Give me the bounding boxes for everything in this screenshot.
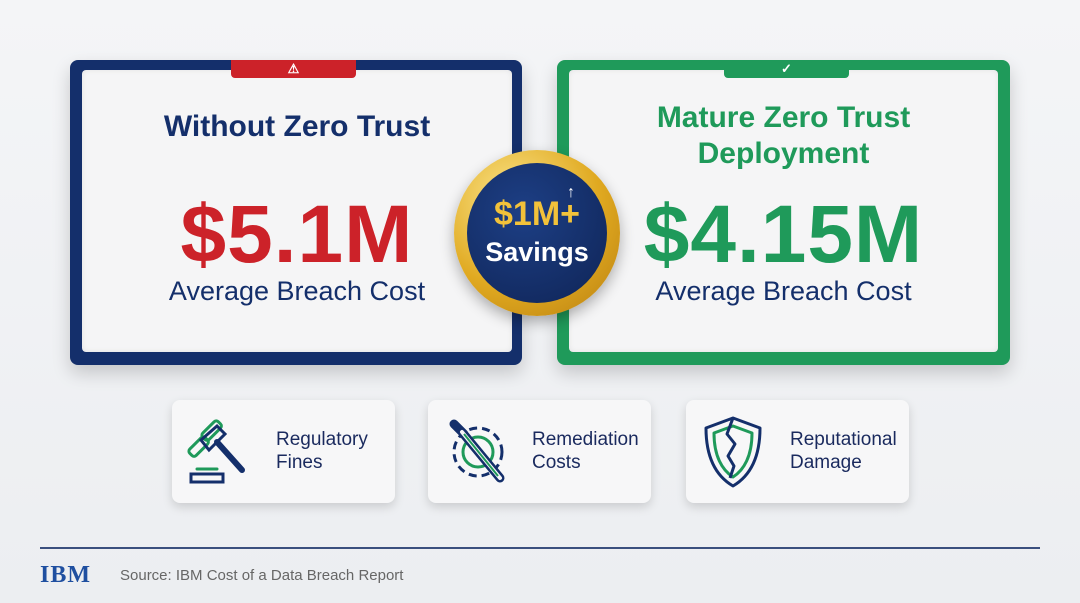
icon: wrench and gear xyxy=(450,420,504,482)
heading left: Without Zero Trust xyxy=(164,110,430,143)
badge: savings: ↑ xyxy=(567,184,575,201)
badge: savings xyxy=(454,150,620,316)
card: remediation costs xyxy=(428,400,651,503)
card: reputational damage xyxy=(686,400,909,503)
card: regulatory fines xyxy=(172,400,395,503)
tab: warning: ⚠ xyxy=(288,61,299,76)
card: reputational damage: Reputational xyxy=(790,429,897,450)
heading right: Deployment xyxy=(698,137,869,170)
logo: IBM: IBM xyxy=(40,562,91,588)
icon: gavel xyxy=(187,419,245,484)
label left: Average Breach Cost xyxy=(169,276,425,306)
tab: check: ✓ xyxy=(781,61,792,76)
tab: warning xyxy=(231,60,356,78)
inner panel left xyxy=(82,70,512,352)
panel: without zero trust xyxy=(70,60,522,365)
card: remediation costs: Remediation xyxy=(532,429,639,450)
card: regulatory fines: Regulatory xyxy=(276,429,368,450)
inner panel right xyxy=(569,70,998,352)
panel: mature zero trust xyxy=(557,60,1010,365)
card: reputational damage: Damage xyxy=(790,452,862,473)
label right: Average Breach Cost xyxy=(655,276,912,306)
heading right: Mature Zero Trust xyxy=(657,101,910,134)
badge: savings: $1M+ xyxy=(494,195,580,233)
card: remediation costs: Costs xyxy=(532,452,581,473)
value left: $5.1M xyxy=(181,189,413,280)
card: regulatory fines: Fines xyxy=(276,452,322,473)
source text: Source: IBM Cost of a Data Breach Report xyxy=(120,567,403,584)
tab: check xyxy=(724,60,849,78)
value right: $4.15M xyxy=(644,189,923,280)
badge: savings: Savings xyxy=(485,237,589,267)
icon: broken shield xyxy=(704,416,762,488)
divider xyxy=(40,547,1040,549)
heading right xyxy=(657,101,910,170)
